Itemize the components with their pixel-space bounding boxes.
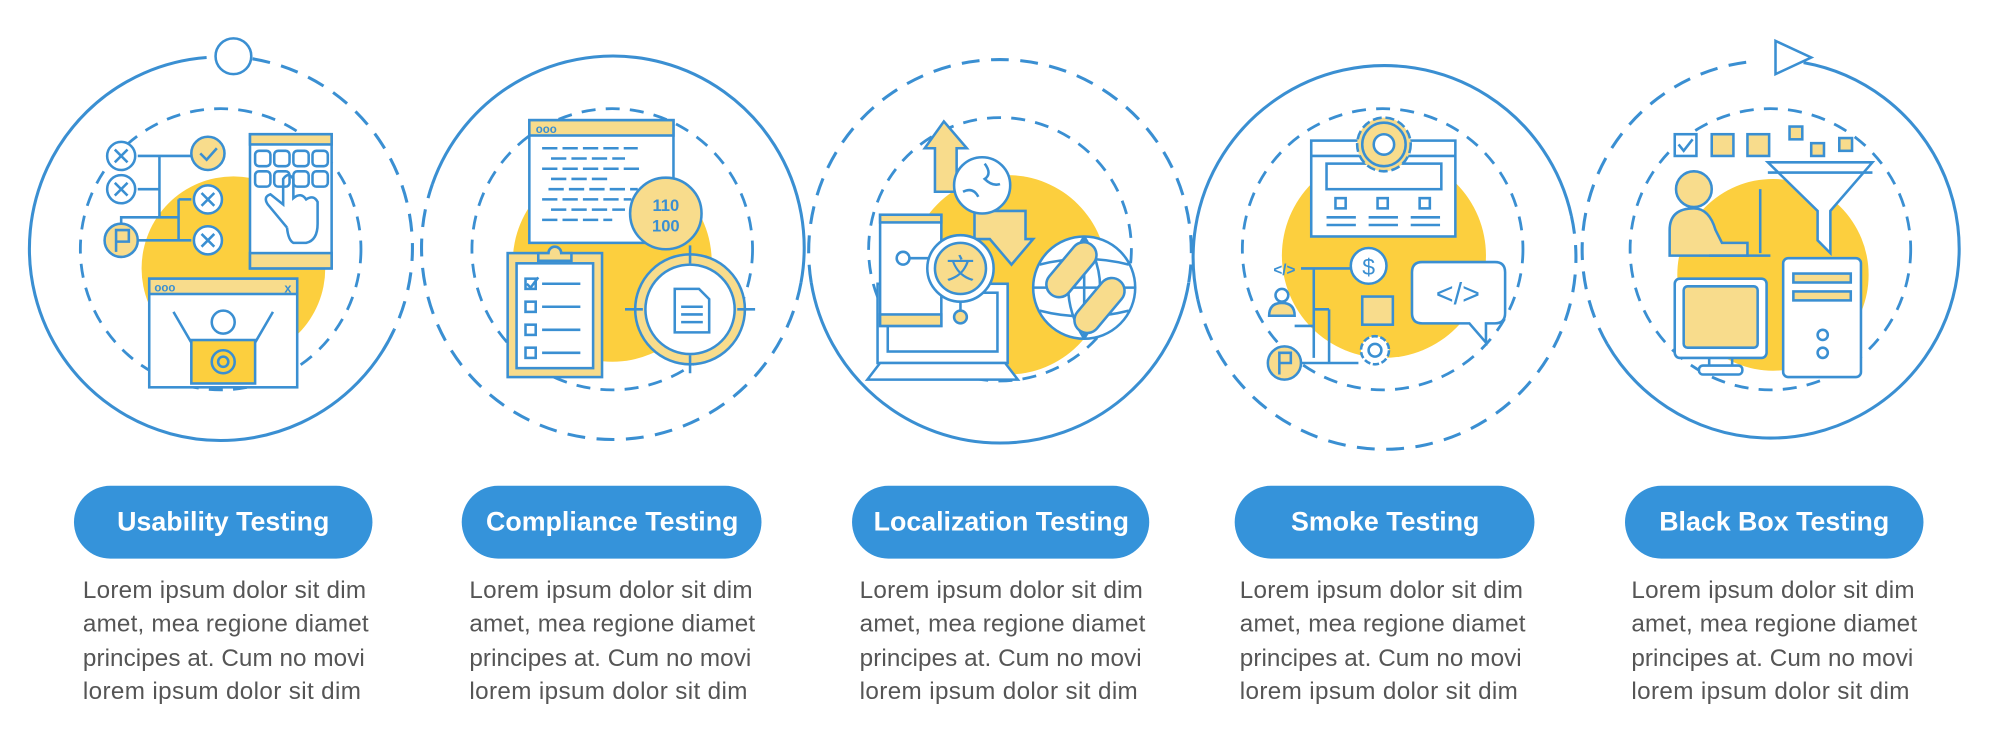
text: step 4: principes at. Cum no movi bbox=[1240, 645, 1522, 672]
text: step 3: principes at. Cum no movi bbox=[860, 645, 1142, 672]
pill: usability testing: Usability Testing bbox=[117, 506, 329, 536]
icon: black box bbox=[1670, 127, 1872, 377]
text: step 5: lorem ipsum dolor sit dim bbox=[1631, 678, 1909, 705]
step 2: compliance testing bbox=[422, 56, 804, 440]
text: step 1: lorem ipsum dolor sit dim bbox=[83, 678, 361, 705]
step 4: smoke testing bbox=[1193, 66, 1576, 449]
text: step 5: principes at. Cum no movi bbox=[1631, 645, 1913, 672]
icon: smoke: </> bbox=[1436, 277, 1480, 311]
text: step 3 bbox=[860, 577, 1146, 705]
text: step 1 bbox=[83, 577, 369, 705]
outer ring 3 bbox=[809, 60, 1191, 443]
text: step 2: amet, mea regione diamet bbox=[469, 610, 755, 637]
text: step 3: lorem ipsum dolor sit dim bbox=[860, 678, 1138, 705]
text: step 2: Lorem ipsum dolor sit dim bbox=[469, 577, 753, 604]
icon: smoke: </> bbox=[1273, 262, 1296, 279]
pill: black box testing: Black Box Testing bbox=[1659, 506, 1889, 536]
text: step 4: lorem ipsum dolor sit dim bbox=[1240, 678, 1518, 705]
icon: compliance: 100 bbox=[652, 216, 680, 235]
step 5: black box testing bbox=[1582, 41, 1959, 438]
icon: localization bbox=[867, 121, 1135, 380]
text: step 3: Lorem ipsum dolor sit dim bbox=[860, 577, 1143, 604]
icon: smoke bbox=[1268, 118, 1505, 380]
pill: localization testing: Localization Testing bbox=[874, 506, 1129, 536]
text: step 1: amet, mea regione diamet bbox=[83, 610, 369, 637]
text: step 4 bbox=[1240, 577, 1526, 705]
text: step 5: amet, mea regione diamet bbox=[1631, 610, 1917, 637]
pill: compliance testing bbox=[462, 486, 761, 559]
icon: usability bbox=[105, 134, 332, 387]
icon: usability: x bbox=[284, 281, 292, 296]
outer ring 5 bbox=[1582, 41, 1959, 438]
step 1: usability testing bbox=[29, 38, 412, 440]
pill: black box testing bbox=[1625, 486, 1923, 559]
text: step 4: amet, mea regione diamet bbox=[1240, 610, 1526, 637]
icon: localization: 文 bbox=[946, 254, 974, 285]
pill: localization testing bbox=[852, 486, 1149, 559]
pill: smoke testing bbox=[1235, 486, 1534, 559]
icon: compliance bbox=[508, 120, 755, 377]
pill: compliance testing: Compliance Testing bbox=[486, 506, 738, 536]
step 3: localization testing bbox=[809, 60, 1191, 443]
text: step 3: amet, mea regione diamet bbox=[860, 610, 1146, 637]
icon: compliance: ooo bbox=[536, 124, 557, 136]
icon: smoke: $ bbox=[1362, 254, 1375, 280]
icon: compliance: 110 bbox=[652, 196, 679, 215]
outer ring 1 bbox=[29, 38, 412, 440]
text: step 1: principes at. Cum no movi bbox=[83, 645, 365, 672]
text: step 2: lorem ipsum dolor sit dim bbox=[469, 678, 747, 705]
text: step 5: Lorem ipsum dolor sit dim bbox=[1631, 577, 1915, 604]
text: step 5 bbox=[1631, 577, 1917, 705]
text: step 1: Lorem ipsum dolor sit dim bbox=[83, 577, 366, 604]
text: step 2 bbox=[469, 577, 755, 705]
outer ring 2 bbox=[422, 56, 804, 440]
outer ring 4 bbox=[1193, 66, 1576, 449]
pill: usability testing bbox=[74, 486, 372, 559]
pill: smoke testing: Smoke Testing bbox=[1291, 506, 1479, 536]
text: step 2: principes at. Cum no movi bbox=[469, 645, 751, 672]
icon: usability: ooo bbox=[154, 282, 175, 294]
text: step 4: Lorem ipsum dolor sit dim bbox=[1240, 577, 1523, 604]
